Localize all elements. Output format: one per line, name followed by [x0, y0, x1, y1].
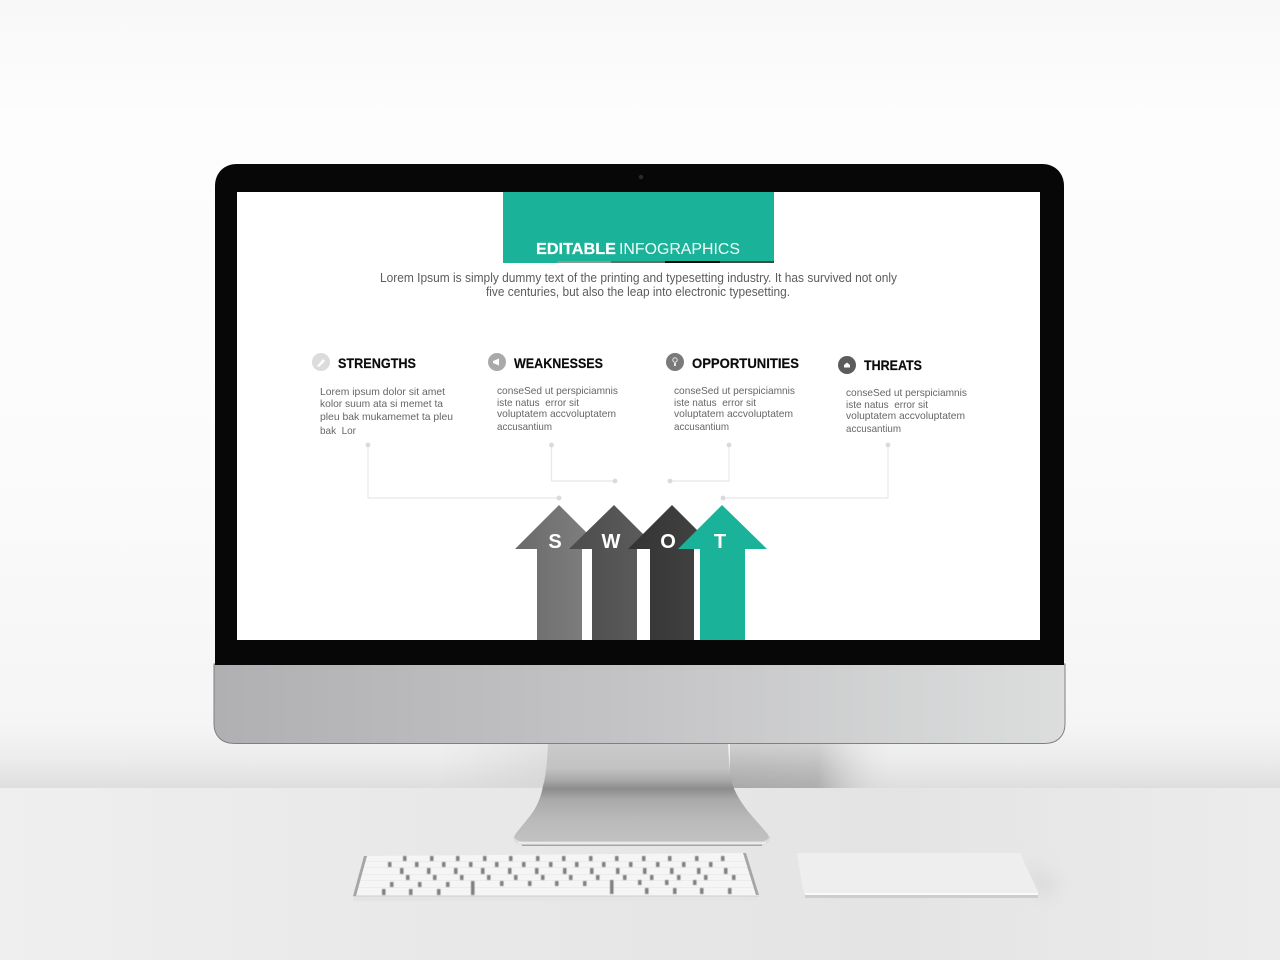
text: opportunities body: iste natus error sit — [674, 397, 756, 409]
text: strengths body — [320, 386, 453, 437]
webcam — [639, 175, 643, 179]
text: strengths body: pleu bak mukamemet ta pleu — [320, 411, 453, 423]
key gaps — [382, 856, 736, 895]
arrow: O — [628, 505, 716, 640]
text: threats body: voluptatem accvoluptatem — [846, 410, 965, 422]
monitor — [214, 164, 1065, 744]
heading: strengths: STRENGTHS — [338, 355, 416, 371]
arrow: W — [569, 505, 658, 640]
text: strengths body: Lorem ipsum dolor sit amet — [320, 386, 445, 398]
icon: light bulb — [666, 353, 684, 371]
text: threats body — [846, 387, 967, 435]
arrow: S — [515, 505, 603, 640]
text: threats body: conseSed ut perspiciamnis — [846, 387, 967, 399]
text: opportunities body: voluptatem accvoluptatem — [674, 408, 793, 420]
title text: EDITABLE — [536, 241, 616, 258]
text: strengths body: kolor suum ata si memet ta — [320, 398, 443, 410]
text: weaknesses body: conseSed ut perspiciamnis — [497, 385, 618, 397]
monitor bezel — [215, 164, 1064, 665]
text: opportunities body — [674, 385, 795, 433]
keyboard — [353, 853, 759, 901]
intro text: five centuries, but also the leap into electronic typesetting. — [486, 285, 790, 299]
title banner: INFOGRAPHICS — [619, 241, 740, 258]
arrow: O: O — [660, 531, 676, 553]
panel: opportunities — [666, 353, 799, 433]
arrow: T: T — [714, 531, 726, 553]
arrow: S: S — [548, 531, 562, 553]
panel: weaknesses — [488, 353, 618, 433]
monitor chin — [214, 664, 1065, 744]
monitor stand — [513, 744, 771, 846]
heading: opportunities: OPPORTUNITIES — [692, 355, 799, 371]
stand shadow on wall — [497, 744, 866, 788]
text: threats body: iste natus error sit — [846, 399, 928, 411]
arrow: T — [678, 505, 767, 640]
SWOT arrows — [515, 505, 767, 640]
text: weaknesses body: iste natus error sit — [497, 397, 579, 409]
text: weaknesses body — [497, 385, 618, 433]
text: opportunities body: conseSed ut perspiciamnis — [674, 385, 795, 397]
icon: megaphone — [488, 353, 506, 371]
text: strengths body: bak Lor — [320, 425, 356, 437]
banner stripe — [503, 261, 774, 263]
slide screen — [237, 192, 1040, 640]
icon: pencil — [312, 353, 330, 371]
key rows — [355, 862, 756, 888]
text: weaknesses body: accusantium — [497, 421, 552, 433]
arrow: W: W — [602, 531, 621, 553]
panel: threats — [838, 356, 967, 435]
title banner — [503, 192, 774, 263]
panel: strengths — [312, 353, 453, 437]
table surface — [0, 788, 1280, 960]
text: weaknesses body: voluptatem accvoluptatem — [497, 408, 616, 420]
connector lines — [366, 443, 890, 500]
intro text: Lorem Ipsum is simply dummy text of the printing and typesetting industry. It has survived not only — [380, 271, 898, 285]
intro text — [380, 271, 898, 299]
trackpad — [797, 853, 1058, 898]
icon: house — [838, 356, 856, 374]
heading: weaknesses: WEAKNESSES — [514, 355, 603, 371]
heading: threats: THREATS — [864, 357, 922, 373]
text: opportunities body: accusantium — [674, 421, 729, 433]
text: threats body: accusantium — [846, 423, 901, 435]
